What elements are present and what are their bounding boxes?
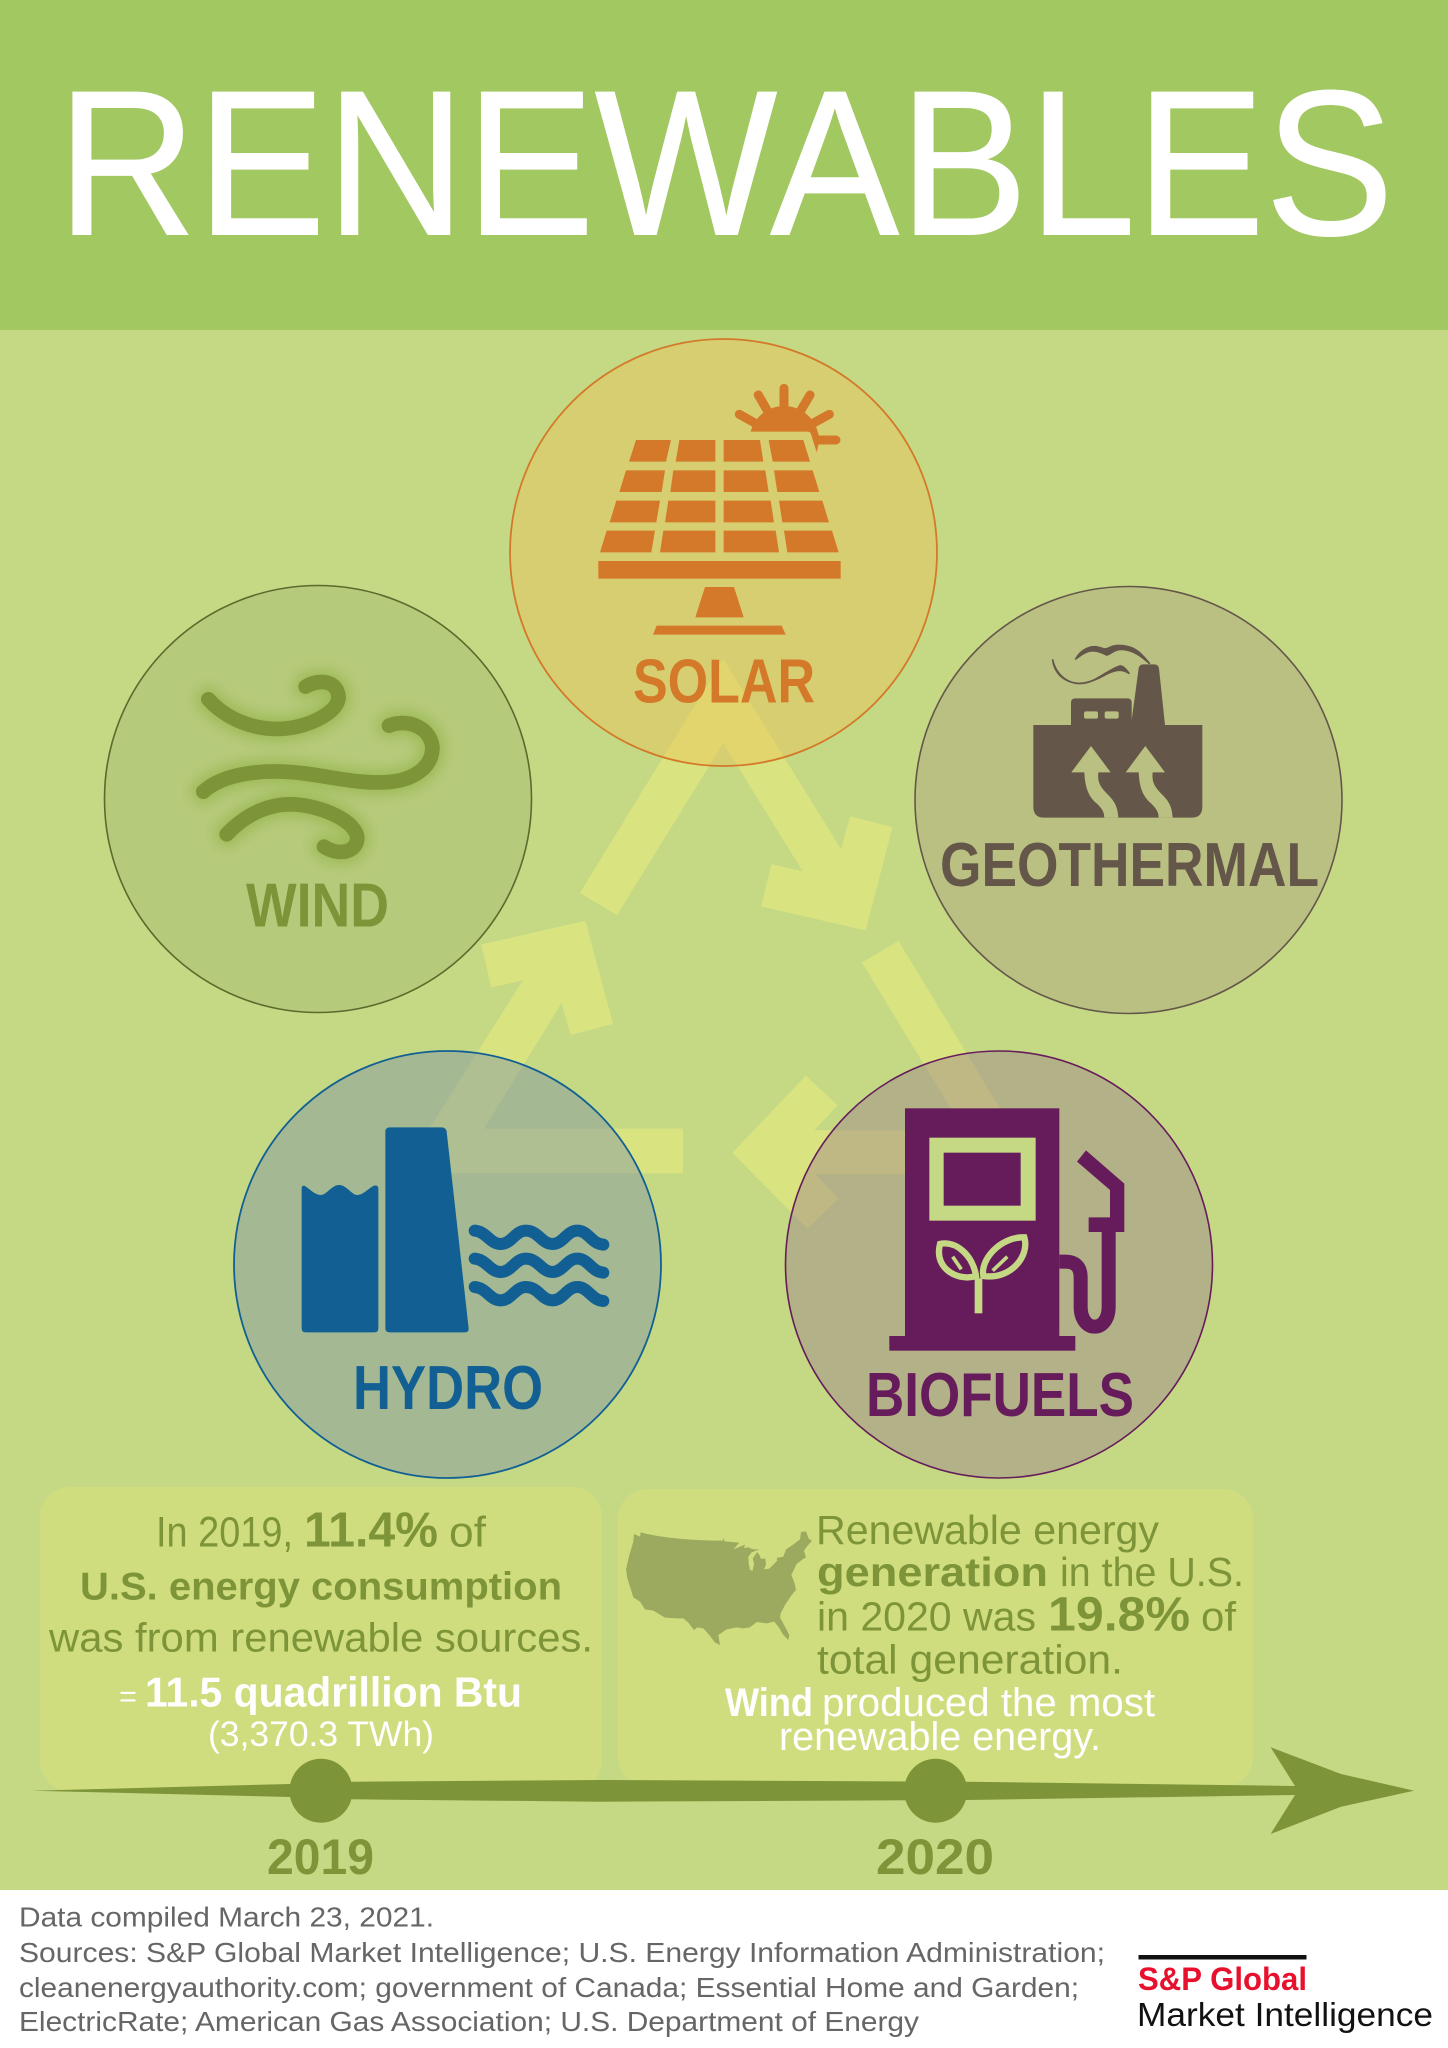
panel: biofuels	[786, 1051, 1212, 1478]
icon: dam and water	[302, 1127, 603, 1332]
icon: wind	[203, 682, 432, 852]
icon: solar panel and sun	[598, 388, 841, 635]
text: 2020 generation: in the U.S.	[1060, 1549, 1244, 1595]
text: 2019 share: U.S. energy consumption	[80, 1566, 562, 1608]
source notes	[19, 1902, 1105, 2037]
text: 2019 share: 11.4%	[304, 1504, 438, 1558]
footer	[0, 1890, 1448, 2048]
text: 2020 generation: renewable energy.	[779, 1715, 1101, 1759]
source notes: Sources: S&P Global Market Intelligence; U.S. Energy Information Administration;	[19, 1937, 1105, 1968]
text: 2020 generation: Renewable energy	[816, 1507, 1159, 1553]
arrow: solar to biofuels side	[580, 659, 892, 930]
icon: biofuel pump	[889, 1108, 1124, 1351]
timeline arrow	[32, 1747, 1414, 1834]
text: 2019 share: In 2019,	[156, 1508, 293, 1556]
logo: S&P Global Market Intelligence: S&P Global	[1138, 1961, 1307, 1997]
source notes: Data compiled March 23, 2021.	[19, 1902, 434, 1932]
label: geothermal: GEOTHERMAL	[940, 831, 1319, 900]
panel: 2019 callout	[40, 1487, 602, 1791]
text: 2020 generation	[725, 1507, 1244, 1759]
label: wind: WIND	[246, 872, 389, 940]
text: 2019 share	[48, 1504, 593, 1754]
text: 2020 generation: Wind	[725, 1681, 813, 1725]
text: 2019 share: (3,370.3 TWh)	[208, 1715, 434, 1754]
panel: hydro	[234, 1051, 661, 1478]
label: 2019: 2019	[267, 1829, 374, 1885]
map: United States	[626, 1531, 812, 1645]
marker: 2019	[290, 1759, 352, 1823]
logo: S&P Global Market Intelligence: Market Intelligence	[1137, 1996, 1433, 2033]
icon: geothermal plant	[1033, 645, 1202, 818]
text: 2019 share: was from renewable sources.	[48, 1614, 593, 1660]
label: 2020: 2020	[876, 1829, 994, 1885]
text: 2019 share: =	[119, 1680, 137, 1714]
body background	[0, 330, 1448, 1890]
text: 2020 generation: generation	[817, 1549, 1048, 1595]
label: biofuels: BIOFUELS	[866, 1361, 1134, 1430]
arrow: geothermal to bottom	[732, 941, 1040, 1229]
text: 2020 generation: total generation.	[817, 1636, 1123, 1682]
text: 2020 generation: in 2020 was	[817, 1594, 1036, 1640]
arrow: bottom to wind side	[401, 921, 683, 1173]
source notes: cleanenergyauthority.com; government of Canada; Essential Home and Garden;	[19, 1972, 1079, 2003]
header band	[0, 0, 1448, 330]
text: 2020 generation: 19.8%	[1048, 1588, 1190, 1642]
logo: S&P Global Market Intelligence	[1137, 1955, 1433, 2033]
panel: 2020 callout	[618, 1489, 1253, 1787]
text: 2020 generation: of	[1201, 1594, 1237, 1640]
panel: geothermal	[915, 586, 1342, 1014]
text: 2019 share: 11.5 quadrillion Btu	[145, 1668, 522, 1716]
label: hydro: HYDRO	[353, 1354, 543, 1423]
source notes: ElectricRate; American Gas Association; U.S. Department of Energy	[19, 2006, 919, 2037]
recycling arrows	[401, 659, 1040, 1229]
marker: 2020	[904, 1759, 967, 1823]
label: solar: SOLAR	[633, 648, 815, 716]
panel: solar	[510, 339, 937, 766]
panel: wind	[104, 586, 532, 1012]
title: RENEWABLES	[57, 48, 1394, 278]
text: 2019 share: of	[449, 1508, 487, 1556]
text: 2020 generation: produced the most	[822, 1681, 1155, 1725]
